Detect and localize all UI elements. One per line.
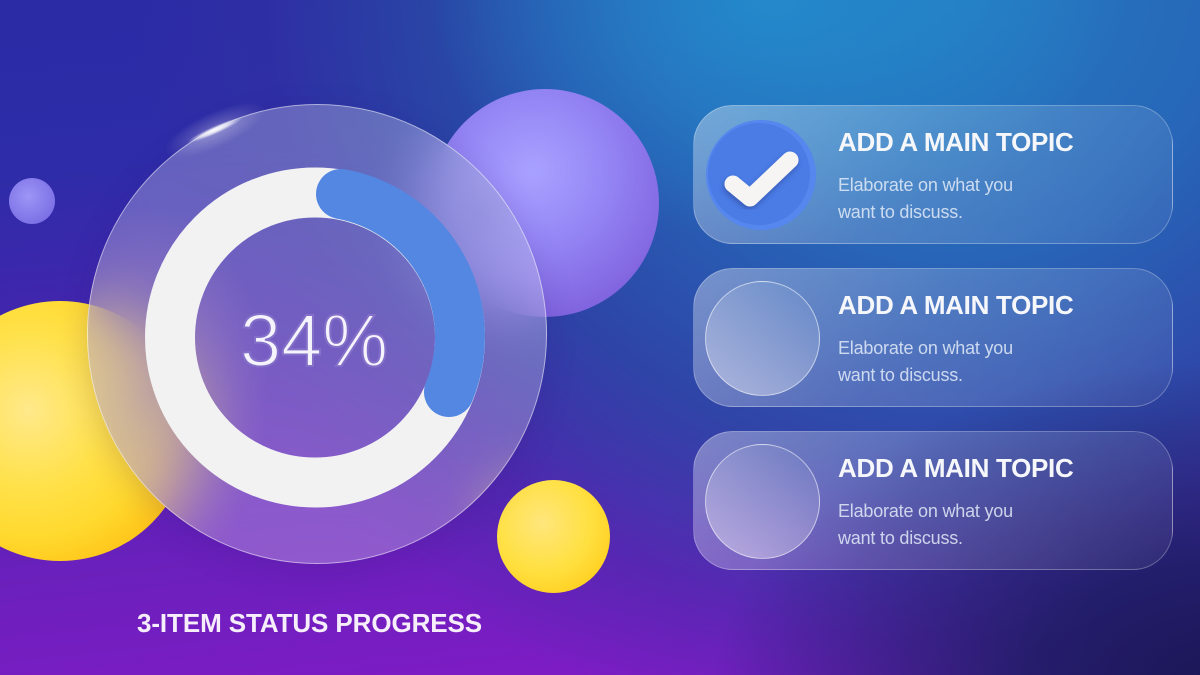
description: want to discuss.	[838, 364, 963, 384]
heading: ADD A MAIN TOPIC	[838, 290, 1073, 320]
panel: topic 3	[693, 431, 1173, 570]
description	[838, 338, 1013, 384]
icon: empty glass circle	[705, 281, 820, 396]
description	[838, 175, 1013, 222]
description: Elaborate on what you	[838, 175, 1013, 195]
panel: topic 1 completed	[693, 105, 1173, 244]
sphere: small yellow	[497, 480, 610, 593]
glint highlight	[139, 67, 291, 193]
description: want to discuss.	[838, 528, 963, 548]
percentage value: 34%	[240, 299, 388, 382]
sphere: large yellow	[0, 301, 190, 561]
heading: ADD A MAIN TOPIC	[838, 127, 1073, 157]
title: 3-ITEM STATUS PROGRESS	[137, 608, 482, 638]
icon: check badge	[706, 120, 816, 230]
description	[838, 501, 1013, 548]
glass disc with donut chart	[87, 104, 547, 564]
icon: empty glass circle	[705, 444, 820, 559]
heading: ADD A MAIN TOPIC	[838, 453, 1073, 483]
sphere: small purple	[9, 178, 55, 224]
panel: topic 2	[693, 268, 1173, 407]
description: want to discuss.	[838, 202, 963, 222]
description: Elaborate on what you	[838, 338, 1013, 358]
description: Elaborate on what you	[838, 501, 1013, 521]
sphere: large purple	[431, 89, 659, 317]
